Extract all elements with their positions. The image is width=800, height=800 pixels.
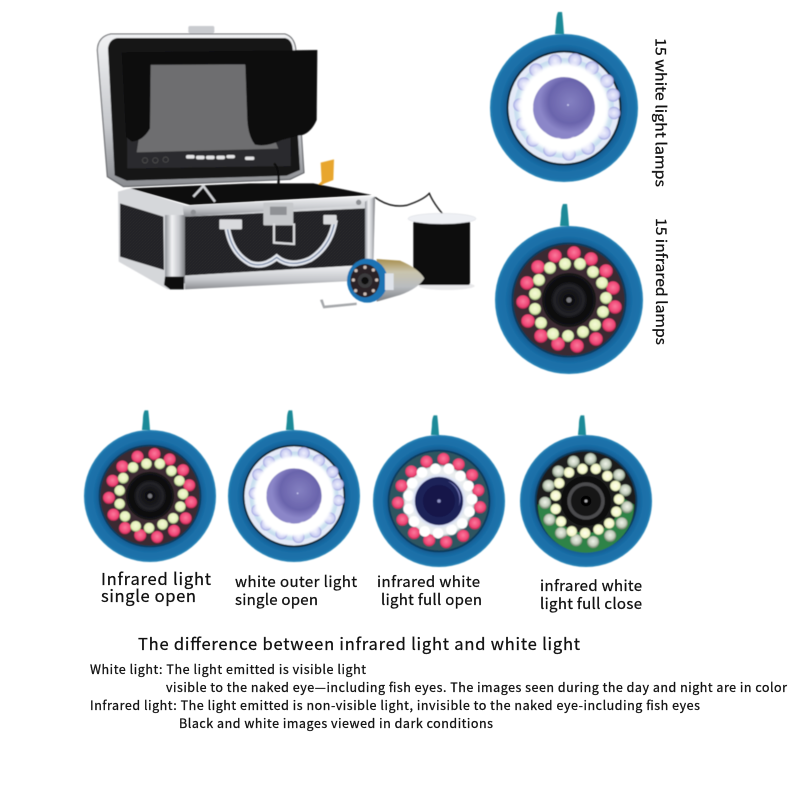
caption: Infrared light — [101, 566, 211, 590]
product photo: case, monitor, cable reel and camera — [97, 26, 476, 308]
camera: 15 infrared lamps — [495, 204, 643, 374]
text block: white light and infrared light explanation — [90, 659, 787, 732]
handle and latch — [191, 186, 361, 265]
sun shade — [122, 50, 317, 145]
infrared light line 2: Black and white images viewed in dark conditions — [179, 713, 493, 732]
white light line 2: visible to the naked eye—including fish eyes. The images seen during the day and night are in color — [166, 677, 787, 696]
camera with white lamps on — [228, 410, 360, 562]
caption: light full close — [540, 593, 642, 614]
heading: The difference between infrared light and white light — [138, 631, 580, 655]
case lid with silver frame — [97, 26, 304, 187]
mode: infrared light single open — [84, 410, 216, 607]
caption: white outer light — [235, 571, 357, 592]
case base — [118, 183, 375, 289]
caption: infrared white — [540, 575, 642, 596]
yellow warranty tag — [313, 159, 334, 189]
camera: 15 white light lamps — [490, 12, 638, 182]
white light line 1: White light: The light emitted is visible light — [90, 659, 366, 678]
label: 15 white light lamps: 15 white light lamps — [650, 38, 672, 187]
monitor cable — [274, 163, 279, 197]
cable reel — [408, 213, 476, 290]
caption: light full open — [381, 589, 482, 610]
monitor with screen and buttons — [127, 52, 291, 168]
cable — [375, 193, 445, 217]
mode: infrared white light full open — [373, 415, 505, 610]
camera with lamps off — [520, 415, 652, 567]
camera with both lamp rings on — [373, 415, 505, 567]
label: 15 infrared lamps: 15 infrared lamps — [651, 218, 672, 345]
camera with infrared lamps on — [84, 410, 216, 562]
infrared light line 1: Infrared light: The light emitted is non-visible light, invisible to the naked eye-including fish eyes — [90, 695, 700, 714]
mode: white outer light single open — [228, 410, 360, 610]
caption: single open — [101, 583, 196, 607]
underwater camera — [320, 259, 424, 308]
caption: single open — [235, 589, 318, 610]
mode: infrared white light full close — [520, 415, 652, 614]
caption: infrared white — [377, 571, 480, 592]
